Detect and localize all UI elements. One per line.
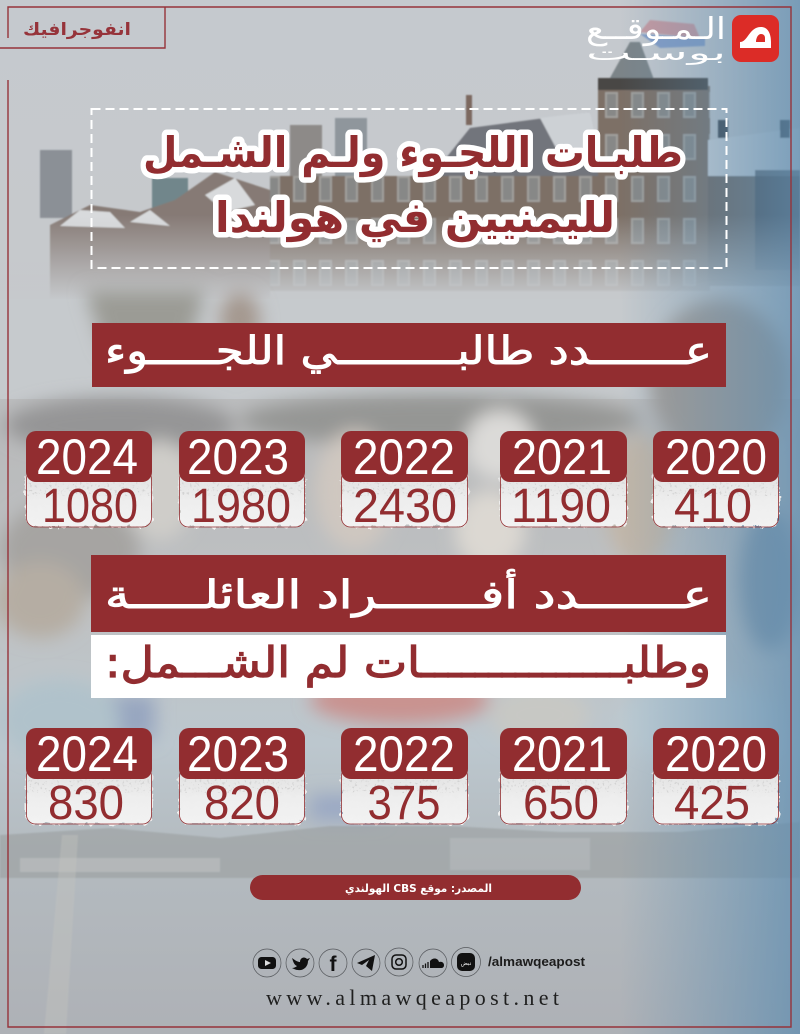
card: 2024 asylum: 1080 xyxy=(42,480,138,533)
title text xyxy=(143,128,683,243)
section heading: family members xyxy=(91,555,726,632)
card: 2020 family: 425 xyxy=(674,777,750,830)
card: 2021 family xyxy=(500,726,627,830)
title box xyxy=(92,109,726,268)
card: 2020 family: 2020 xyxy=(665,726,767,782)
logo wordmark: بوسـت xyxy=(586,41,726,65)
card: 2023 family: 820 xyxy=(204,777,280,830)
card: 2021 asylum: 1190 xyxy=(511,480,611,533)
card: 2023 family: 2023 xyxy=(187,726,289,782)
card: 2022 family: 2022 xyxy=(353,726,455,782)
icon: youtube xyxy=(253,949,281,977)
icon: facebook xyxy=(319,949,347,977)
card: 2021 asylum xyxy=(500,429,627,533)
card: 2020 asylum: 2020 xyxy=(665,429,767,485)
title text: طلبـات اللجـوء ولـم الشـمل xyxy=(143,128,683,178)
card: 2024 asylum: 2024 xyxy=(36,429,138,485)
card: 2024 family xyxy=(26,726,152,830)
icon: twitter xyxy=(286,949,314,977)
source pill xyxy=(250,875,581,900)
section heading: reunification requests xyxy=(91,635,726,698)
icon: logo mark xyxy=(732,15,779,62)
section heading: reunification requests: وطلبـــــــــــــــات لم الشـــمل: xyxy=(105,638,711,688)
category tag: انفوجرافيك xyxy=(23,20,131,40)
card: 2022 family xyxy=(341,726,468,830)
card: 2023 family xyxy=(179,726,305,830)
card: 2022 asylum xyxy=(341,429,468,533)
social icons xyxy=(253,948,480,977)
icon: instagram xyxy=(385,948,413,976)
website: www.almawqeapost.net xyxy=(266,985,559,1010)
section heading: family members: عـــــــدد أفـــــــراد العائلـــــة xyxy=(105,569,712,618)
logo wordmark: الـمـوقــع xyxy=(586,12,726,47)
card: 2021 family: 2021 xyxy=(512,726,612,782)
card: 2022 asylum: 2022 xyxy=(353,429,455,485)
card: 2022 family: 375 xyxy=(368,777,440,830)
icon: nabd: نبض xyxy=(461,960,472,967)
title text: لليمنيين في هولندا xyxy=(215,193,615,243)
social handle: /almawqeapost xyxy=(488,954,586,969)
logo xyxy=(586,12,779,65)
card: 2020 asylum xyxy=(653,429,779,533)
logo wordmark xyxy=(586,12,726,65)
card: 2021 family: 650 xyxy=(523,777,599,830)
card: 2022 asylum: 2430 xyxy=(353,480,457,533)
section heading: asylum seekers: عـــــــدد طالبـــــــــي اللجـــــوء xyxy=(105,329,712,374)
section heading: asylum seekers xyxy=(92,323,726,387)
card: 2021 asylum: 2021 xyxy=(512,429,612,485)
icon: soundcloud xyxy=(419,949,447,977)
card: 2024 family: 830 xyxy=(48,777,124,830)
icon: telegram xyxy=(352,949,380,977)
card: 2023 asylum: 1980 xyxy=(191,480,291,533)
card: 2020 asylum: 410 xyxy=(674,480,752,533)
card: 2023 asylum xyxy=(179,429,305,533)
icon: facebook: f xyxy=(330,953,338,976)
card: 2023 asylum: 2023 xyxy=(187,429,289,485)
source pill: المصدر: موقع CBS الهولندي xyxy=(345,882,492,895)
icon: nabd xyxy=(452,948,480,976)
card: 2024 asylum xyxy=(26,429,152,533)
card: 2020 family xyxy=(653,726,779,830)
card: 2024 family: 2024 xyxy=(36,726,138,782)
